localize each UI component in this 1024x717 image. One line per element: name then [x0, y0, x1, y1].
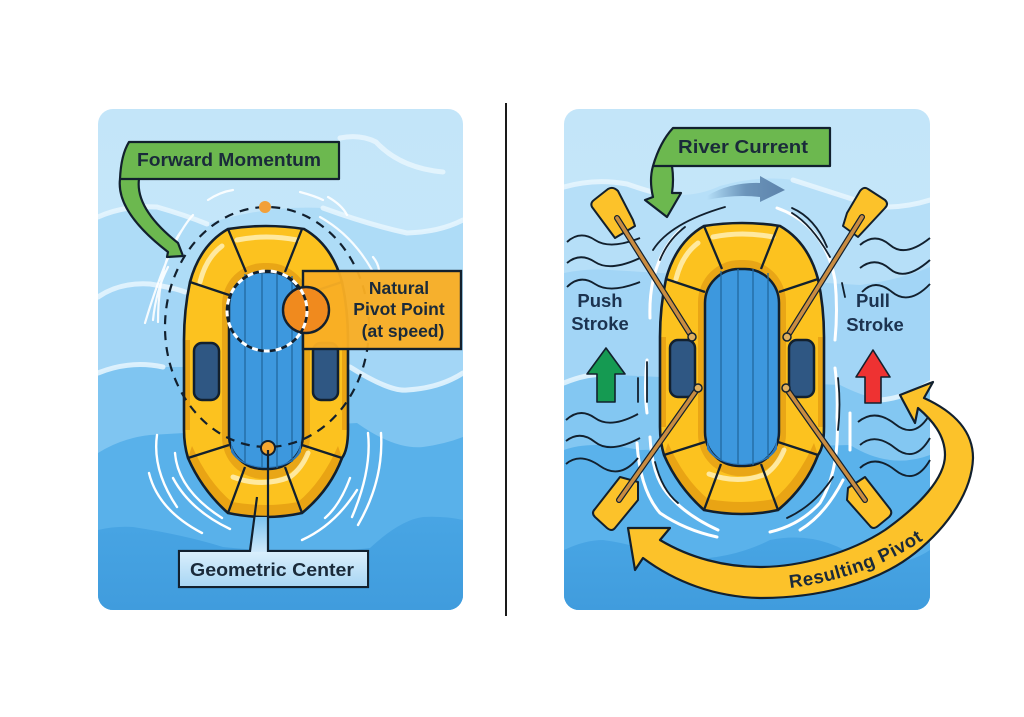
arrow: pull stroke (red): [856, 350, 890, 403]
oar: top left: [591, 188, 696, 341]
label: pull stroke: Pull: [856, 290, 890, 311]
arrow: current flow: [707, 176, 785, 202]
water motion lines around stern: [149, 433, 381, 540]
label: pull stroke: Stroke: [846, 314, 904, 335]
label: pull stroke: [846, 290, 904, 335]
label text: River Current: [678, 137, 808, 157]
raft: left: [184, 226, 348, 517]
water background: right panel: [564, 109, 930, 610]
water background: left panel: [98, 109, 463, 610]
callout text: [353, 278, 445, 341]
label: push stroke: Push: [577, 290, 623, 311]
raft: right: [660, 223, 824, 514]
label text: Forward Momentum: [137, 150, 321, 170]
callout: geometric center: [179, 450, 368, 587]
icon: orange pivot circle: [283, 287, 329, 333]
icon: geometric center dot: [261, 441, 275, 455]
arrow text: [790, 534, 932, 588]
label: river current: [645, 128, 830, 217]
arrow label: forward momentum: [120, 142, 339, 257]
dashed path of rotation: [165, 207, 369, 447]
dashed pivot circle: [227, 271, 307, 351]
callout text: (at speed): [362, 321, 444, 341]
panel: paddle strokes and resulting pivot: [564, 109, 974, 610]
oar: bottom right: [782, 384, 891, 528]
callout text: Natural: [369, 278, 429, 298]
center divider: [505, 103, 507, 616]
oar: top right: [783, 188, 887, 341]
callout text: Pivot Point: [353, 299, 445, 319]
arrow: resulting pivot: [626, 380, 974, 600]
label: push stroke: [571, 290, 629, 334]
icon: top dot: [259, 201, 271, 213]
label text: Geometric Center: [190, 560, 354, 580]
water motion lines around raft: [637, 207, 850, 537]
arrow: push stroke (green): [587, 348, 625, 402]
label: push stroke: Stroke: [571, 313, 629, 334]
oar: bottom left: [593, 384, 702, 530]
wave lines: right side: [858, 238, 930, 476]
wave lines: left side: [566, 235, 640, 471]
callout: natural pivot point: [283, 271, 461, 349]
arrow: resulting pivot: Resulting Pivot: [789, 531, 924, 588]
panel: forward momentum and natural pivot: [98, 109, 463, 610]
water motion lines around bow: [145, 190, 379, 323]
